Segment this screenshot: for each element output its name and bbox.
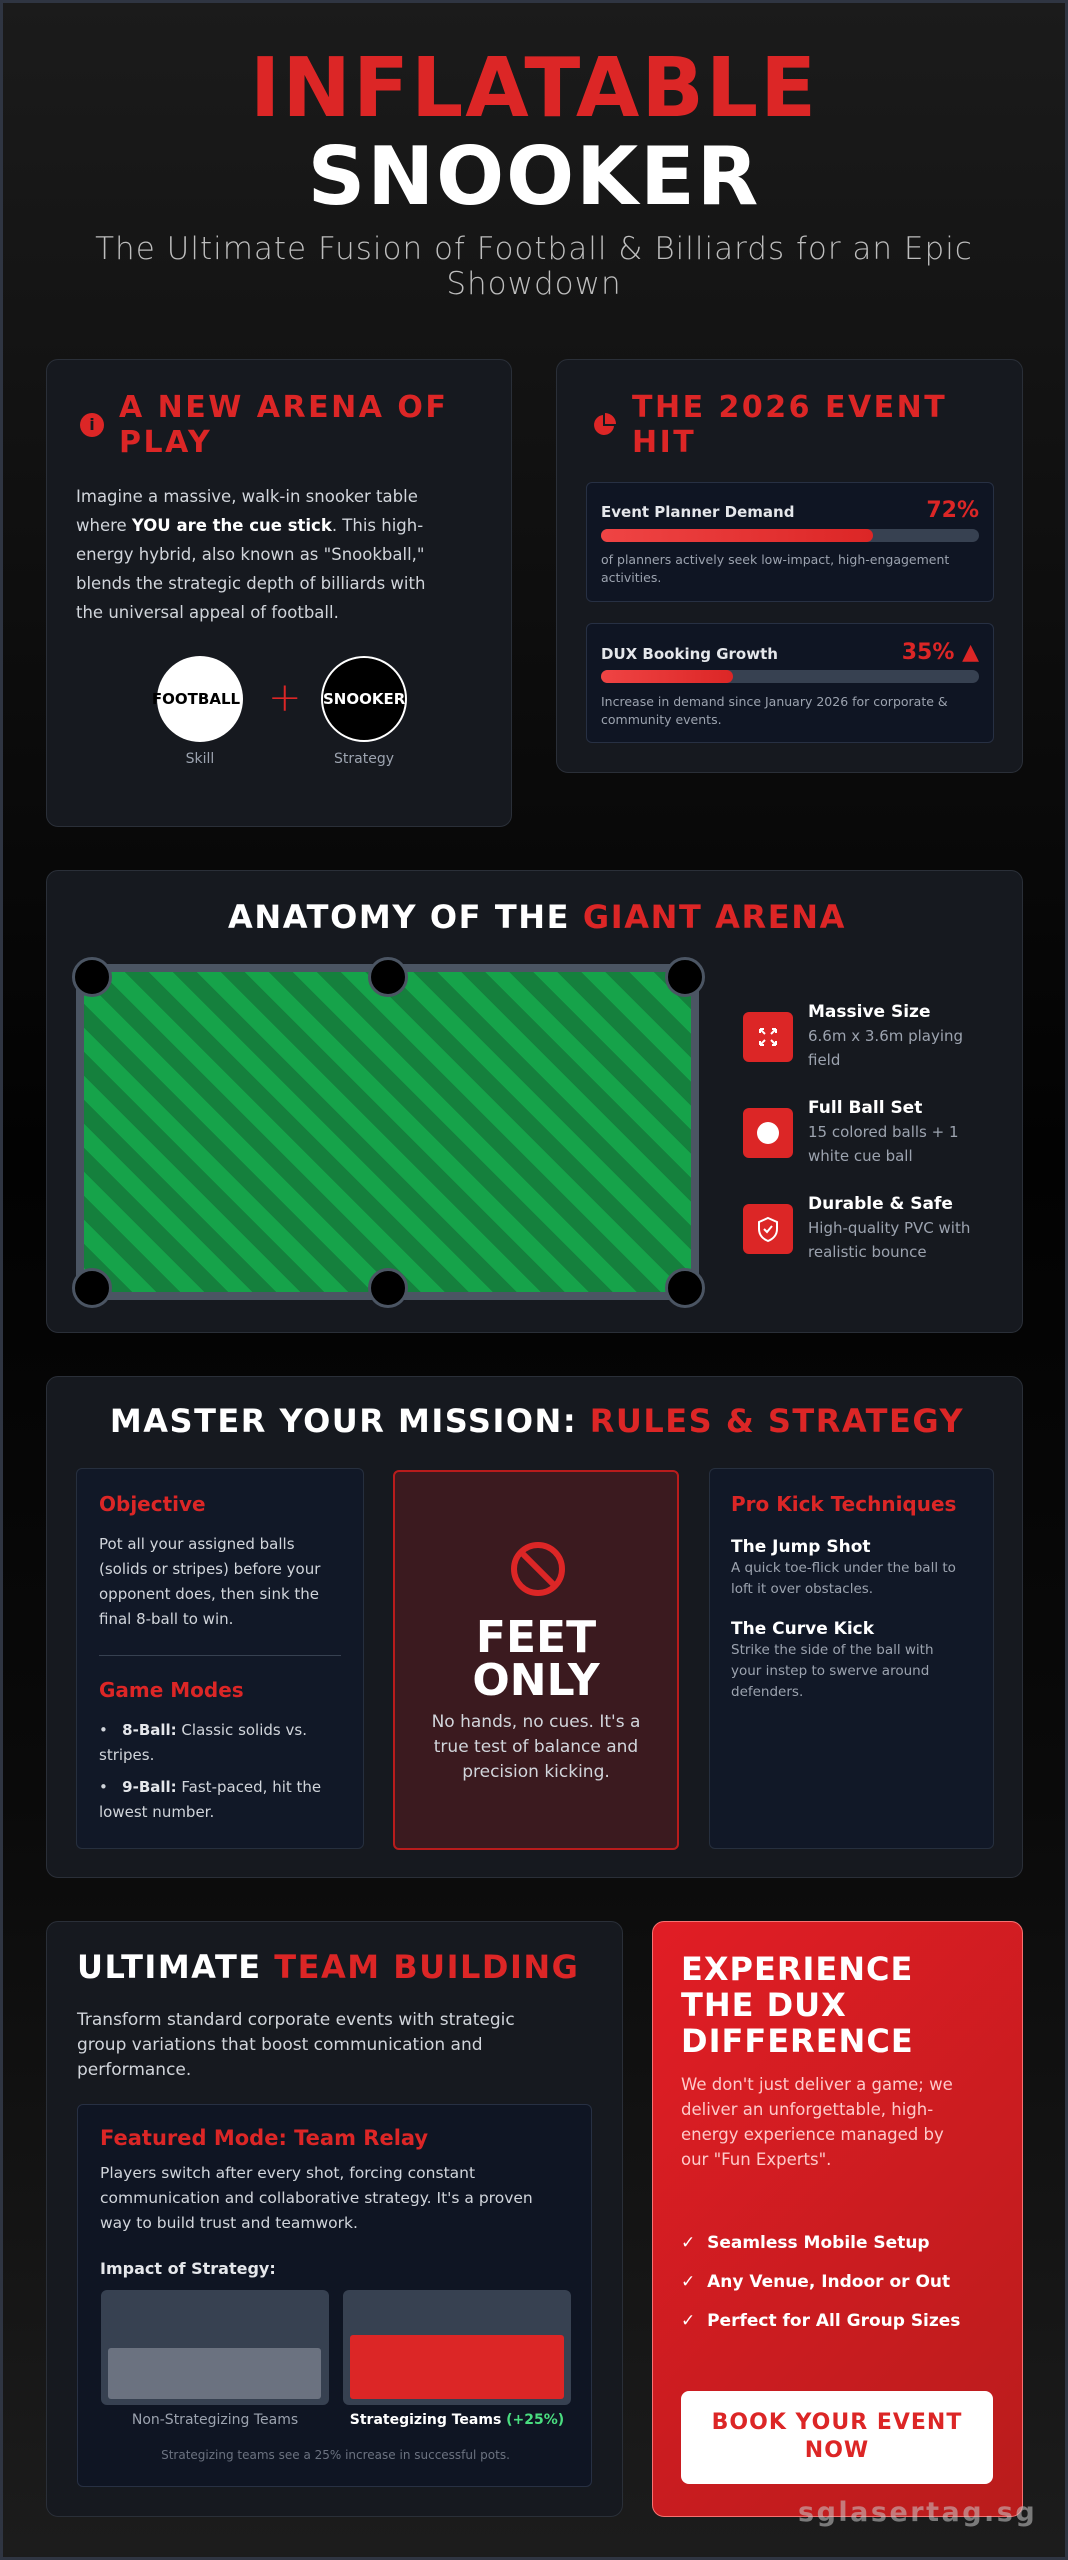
column: feet only: precision kicking. (462, 1762, 610, 1782)
heading: anatomy: ANATOMY OF THE GIANT ARENA (228, 898, 846, 936)
panel: DUX difference: DIFFERENCE (681, 2022, 914, 2060)
column: pro kick techniques: loft it over obstacles. (731, 1581, 873, 1597)
panel: rules (46, 1376, 1023, 1878)
featured mode box: Impact of Strategy: (100, 2259, 276, 2278)
column: pro kick techniques: The Jump Shot (731, 1537, 871, 1557)
icon: info (80, 413, 104, 437)
panel: anatomy (46, 870, 1023, 1333)
heading: new arena: A NEW ARENA OF (119, 390, 448, 425)
column: objective & modes: final 8-ball to win. (99, 1610, 233, 1628)
featured mode box: Players switch after every shot, forcing constant (100, 2164, 475, 2182)
stat: event planner demand: Event Planner Demand (601, 503, 794, 521)
column: objective & modes (76, 1468, 364, 1849)
stat: DUX booking growth: 35% ▲ (902, 640, 979, 665)
watermark: sglasertag.sg (798, 2497, 1037, 2528)
feature: full ball set: Full Ball Set (808, 1098, 922, 1118)
featured mode box (77, 2104, 592, 2487)
column: objective & modes: • 8-Ball: Classic solids vs. (99, 1721, 307, 1739)
feature: durable: Durable & Safe (808, 1194, 953, 1214)
column: objective & modes: (solids or stripes) before your (99, 1560, 320, 1578)
button: book (681, 2391, 993, 2484)
stat: event planner demand: of planners actively seek low-impact, high-engagement (601, 552, 949, 567)
heading: new arena: PLAY (119, 425, 212, 460)
feature: durable: High-quality PVC with (808, 1219, 970, 1237)
column: objective & modes: Pot all your assigned balls (99, 1535, 295, 1553)
icon: snooker ball (321, 656, 407, 742)
bar chart (101, 2290, 571, 2428)
icon: pie chart (594, 413, 616, 435)
column: pro kick techniques: defenders. (731, 1684, 803, 1700)
column: objective & modes: Objective (99, 1492, 206, 1516)
stat: event planner demand: 72% (926, 498, 979, 523)
text: arena intro: blends the strategic depth of billiards with (76, 574, 425, 593)
stat: DUX booking growth (586, 623, 994, 743)
stat: DUX booking growth: Increase in demand since January 2026 for corporate & (601, 694, 948, 709)
heading: 2026 event: HIT (632, 425, 696, 460)
text: arena intro: Imagine a massive, walk-in snooker table (76, 487, 418, 506)
column: feet only: FEET (476, 1612, 596, 1663)
panel: team building (46, 1921, 623, 2517)
panel: DUX difference: ✓ Perfect for All Group Sizes (681, 2311, 960, 2331)
text: team intro: performance. (77, 2060, 191, 2080)
text: arena intro: energy hybrid, also known as "Snookball," (76, 545, 425, 564)
feature: massive size: Massive Size (808, 1002, 930, 1022)
feature: full ball set: 15 colored balls + 1 (808, 1123, 958, 1141)
bar chart: Non-Strategizing Teams (132, 2412, 298, 2428)
subtitle (95, 231, 973, 302)
icon: expand (743, 1012, 793, 1062)
icon: info: i (89, 415, 95, 434)
button: book: BOOK YOUR EVENT (712, 2410, 962, 2435)
icon: snooker ball: SNOOKER (323, 690, 405, 708)
feature: full ball set: white cue ball (808, 1147, 913, 1165)
column: feet only: No hands, no cues. It's a (432, 1712, 640, 1732)
label strategy: Strategy (334, 751, 394, 767)
bar chart: Strategizing Teams (+25%) (350, 2412, 564, 2428)
column: objective & modes: • 9-Ball: Fast-paced, hit the (99, 1778, 321, 1796)
panel: 2026 event hit (556, 359, 1023, 773)
feature: durable: realistic bounce (808, 1243, 927, 1261)
pockets (72, 957, 112, 997)
feature: full ball set (743, 1098, 958, 1165)
column: feet only: true test of balance and (434, 1737, 638, 1757)
stat: DUX booking growth: community events. (601, 712, 722, 727)
feature: massive size: field (808, 1051, 840, 1069)
panel: DUX difference: our "Fun Experts". (681, 2150, 831, 2169)
title line 2: SNOOKER (308, 130, 760, 223)
panel: DUX difference: THE DUX (681, 1986, 847, 2024)
text: arena intro (76, 487, 425, 622)
feature: durable (743, 1194, 970, 1261)
subtitle: The Ultimate Fusion of Football & Billiards for an Epic (95, 231, 973, 267)
column: pro kick techniques: Pro Kick Techniques (731, 1492, 956, 1516)
text: arena intro: the universal appeal of football. (76, 603, 339, 622)
featured mode box: communication and collaborative strategy. It's a proven (100, 2189, 533, 2207)
icon: prohibited (511, 1542, 565, 1596)
feature: massive size: 6.6m x 3.6m playing (808, 1027, 963, 1045)
stat: event planner demand: activities. (601, 570, 661, 585)
plus sign: + (268, 675, 302, 721)
column: pro kick techniques (709, 1468, 994, 1849)
column: objective & modes: opponent does, then sink the (99, 1585, 319, 1603)
panel: DUX difference (652, 1921, 1023, 2517)
heading: new arena (119, 390, 448, 460)
featured mode box: Featured Mode: Team Relay (100, 2126, 428, 2150)
panel: new arena (46, 359, 512, 827)
panel: DUX difference: EXPERIENCE (681, 1950, 913, 1988)
featured mode box: way to build trust and teamwork. (100, 2214, 358, 2232)
text: team intro: group variations that boost communication and (77, 2035, 483, 2055)
panel: DUX difference: ✓ Seamless Mobile Setup (681, 2233, 930, 2253)
icon: football ball: FOOTBALL (152, 690, 240, 708)
label skill: Skill (186, 751, 214, 767)
column: pro kick techniques: A quick toe-flick under the ball to (731, 1560, 956, 1576)
feature: massive size (743, 1002, 963, 1069)
snooker table (72, 957, 705, 1308)
panel: DUX difference: energy experience managed by (681, 2125, 944, 2144)
featured mode box: Strategizing teams see a 25% increase in successful pots. (161, 2448, 510, 2462)
button: book: NOW (805, 2438, 869, 2463)
icon: ball (743, 1108, 793, 1158)
icon: football ball (157, 656, 243, 742)
panel: DUX difference: ✓ Any Venue, Indoor or Out (681, 2272, 950, 2292)
text: team intro (76, 2010, 515, 2080)
column: objective & modes: lowest number. (99, 1803, 214, 1821)
heading: team building: ULTIMATE TEAM BUILDING (77, 1948, 579, 1986)
column: objective & modes: Game Modes (99, 1678, 244, 1702)
heading: rules: MASTER YOUR MISSION: RULES & STRATEGY (110, 1402, 964, 1440)
icon: shield (743, 1204, 793, 1254)
heading: 2026 event: THE 2026 EVENT (632, 390, 947, 425)
column: objective & modes: stripes. (99, 1746, 154, 1764)
text: team intro: Transform standard corporate events with strategic (77, 2010, 515, 2030)
column: feet only: ONLY (472, 1655, 600, 1706)
stat: event planner demand (586, 482, 994, 602)
stat: DUX booking growth: DUX Booking Growth (601, 645, 778, 663)
panel: DUX difference: deliver an unforgettable, high- (681, 2100, 933, 2119)
panel: DUX difference: We don't just deliver a game; we (681, 2075, 953, 2094)
heading: 2026 event (632, 390, 947, 460)
column: feet only (393, 1470, 679, 1850)
column: pro kick techniques: The Curve Kick (731, 1619, 874, 1639)
column: pro kick techniques: Strike the side of the ball with (731, 1642, 934, 1658)
subtitle: Showdown (446, 266, 622, 302)
text: arena intro: where YOU are the cue stick. This high- (76, 516, 423, 535)
column: pro kick techniques: your instep to swerve around (731, 1663, 929, 1679)
title: INFLATABLE (250, 41, 818, 136)
